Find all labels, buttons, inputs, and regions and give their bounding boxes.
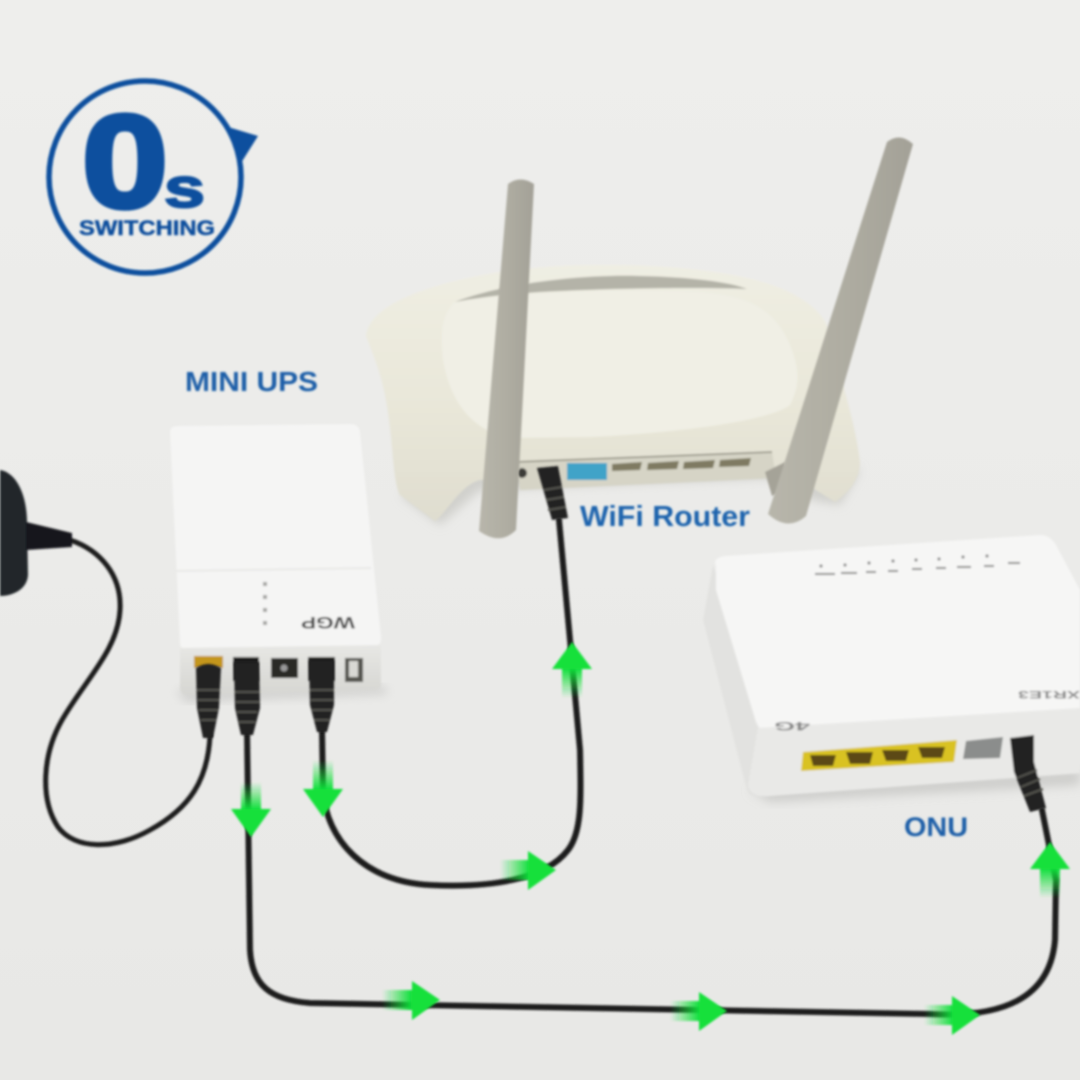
ONU yellow LAN ports bbox=[801, 740, 957, 771]
router power socket bbox=[517, 468, 527, 478]
router ribbed antenna hinge bbox=[765, 462, 790, 496]
label: ONU: ONU bbox=[904, 812, 968, 842]
ONU model mark: XR1E3 bbox=[1018, 688, 1080, 700]
ONU status labels bbox=[815, 554, 1020, 575]
ONU logo: 4G bbox=[774, 719, 810, 733]
UPS logo: WGP bbox=[301, 613, 355, 632]
shadow under router bbox=[400, 440, 860, 525]
shadow under UPS bbox=[176, 686, 388, 702]
flow arrows bbox=[231, 642, 1070, 1035]
adapter cable bbox=[46, 540, 210, 845]
arrow: right two along ONU cable bbox=[670, 992, 727, 1031]
ONU top face bbox=[715, 535, 1080, 735]
UPS front face bbox=[180, 645, 381, 695]
router shell bbox=[366, 265, 860, 521]
plug: output one bbox=[234, 662, 260, 735]
badge ring with pointer bbox=[49, 81, 258, 273]
ONU front face bbox=[748, 708, 1080, 796]
cable: UPS to ONU bbox=[247, 730, 1056, 1015]
antenna: left bbox=[479, 180, 534, 538]
arrow: right three along ONU cable bbox=[924, 996, 980, 1035]
arrow: right one along ONU cable bbox=[382, 981, 440, 1020]
power adapter with cable bbox=[0, 470, 210, 845]
badge text bbox=[79, 88, 215, 240]
device: mini UPS bbox=[170, 424, 381, 695]
plug: router power bbox=[537, 466, 568, 520]
plug: AC input bbox=[196, 664, 221, 738]
cable: UPS to router bbox=[322, 520, 581, 886]
router grey indicator strip bbox=[455, 276, 747, 302]
shadow under ONU bbox=[750, 770, 1080, 802]
UPS top face bbox=[170, 424, 381, 650]
badge text: SWITCHING bbox=[79, 216, 215, 240]
UPS top seam bbox=[175, 568, 371, 571]
badge: 0s switching bbox=[49, 81, 258, 273]
ONU phone port bbox=[963, 737, 1003, 759]
UPS indicator lights bbox=[263, 582, 267, 625]
arrow: right along router cable bbox=[500, 851, 556, 890]
router rear panel bbox=[515, 452, 776, 490]
badge text: s bbox=[164, 156, 205, 219]
ONU left side bbox=[703, 565, 770, 796]
arrow: down from UPS output one bbox=[231, 782, 271, 837]
adapter strain relief bbox=[26, 522, 72, 550]
router WAN port bbox=[567, 463, 607, 480]
UPS plugs bbox=[196, 660, 334, 738]
label: WiFi Router: WiFi Router bbox=[580, 501, 750, 533]
device: WiFi router bbox=[366, 265, 860, 521]
ONU power plug bbox=[1010, 735, 1046, 812]
arrow: down from UPS output two bbox=[303, 760, 343, 817]
router inner panel bbox=[442, 290, 798, 438]
heading: MINI UPS: MINI UPS bbox=[185, 366, 318, 397]
arrow: up to ONU bbox=[1030, 842, 1070, 898]
adapter body bbox=[0, 470, 28, 596]
plug: output two bbox=[309, 660, 334, 732]
router LAN ports bbox=[612, 458, 751, 471]
UPS ports bbox=[194, 656, 363, 682]
device: ONU bbox=[703, 535, 1080, 812]
arrow: up to router bbox=[552, 642, 592, 698]
router rear underside shadow bbox=[515, 452, 772, 462]
badge text: 0 bbox=[82, 88, 168, 235]
antenna: right bbox=[768, 137, 913, 524]
